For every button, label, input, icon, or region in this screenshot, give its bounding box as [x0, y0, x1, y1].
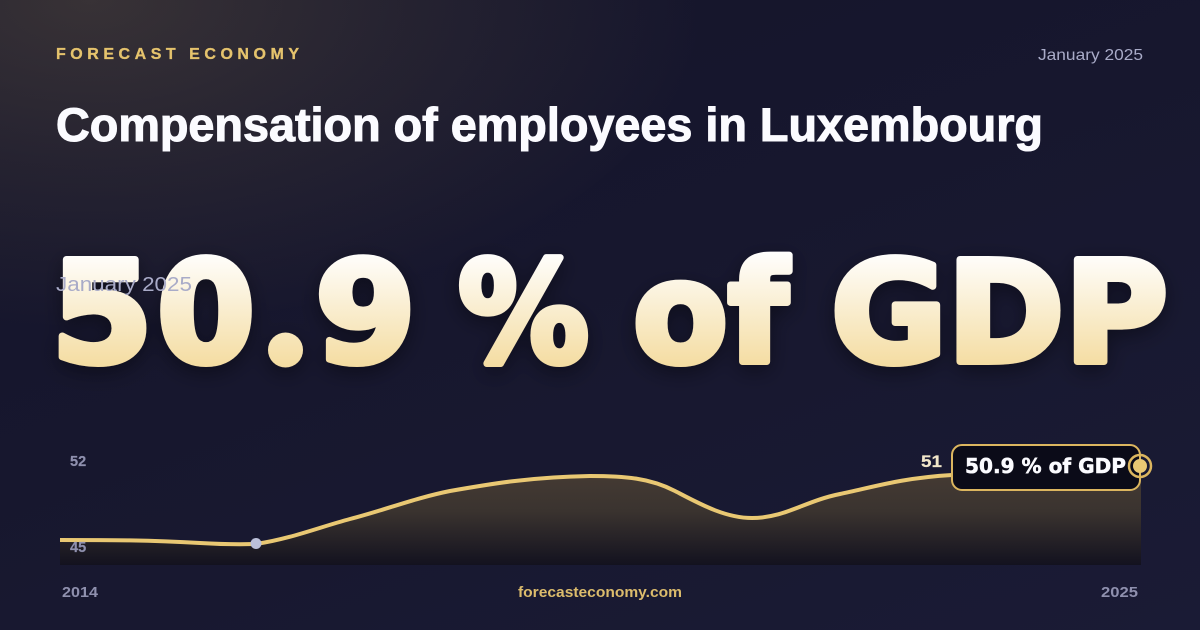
- axis label 52: 52: [70, 454, 86, 470]
- hero value: [51, 232, 1168, 396]
- hero value: 5: [51, 232, 153, 396]
- website: forecasteconomy.com: [518, 585, 682, 601]
- title: Compensation of employees in Luxembourg: [56, 98, 1043, 151]
- hero value: of: [633, 232, 790, 396]
- current value pill: [952, 445, 1140, 490]
- hero value: .: [277, 310, 296, 368]
- date top right: January 2025: [1038, 47, 1143, 64]
- axis label 45: 45: [70, 540, 86, 556]
- hero value: 0: [157, 232, 255, 396]
- brand label: FORECAST ECONOMY: [56, 46, 299, 63]
- area chart: [60, 445, 1151, 565]
- hero value: GDP: [831, 232, 1168, 396]
- current value pill: 50.9 % of GDP: [965, 454, 1126, 478]
- end year: 2025: [1101, 585, 1138, 601]
- hero value: 9: [315, 232, 416, 396]
- start year: 2014: [62, 585, 98, 601]
- area fill: [60, 470, 1141, 565]
- overlapping date label: January 2025: [56, 274, 192, 296]
- value label 51: 51: [921, 452, 942, 471]
- current point marker: [1129, 455, 1151, 477]
- hero value: %: [458, 232, 589, 396]
- low point marker: [250, 538, 262, 549]
- trend line: [60, 475, 952, 544]
